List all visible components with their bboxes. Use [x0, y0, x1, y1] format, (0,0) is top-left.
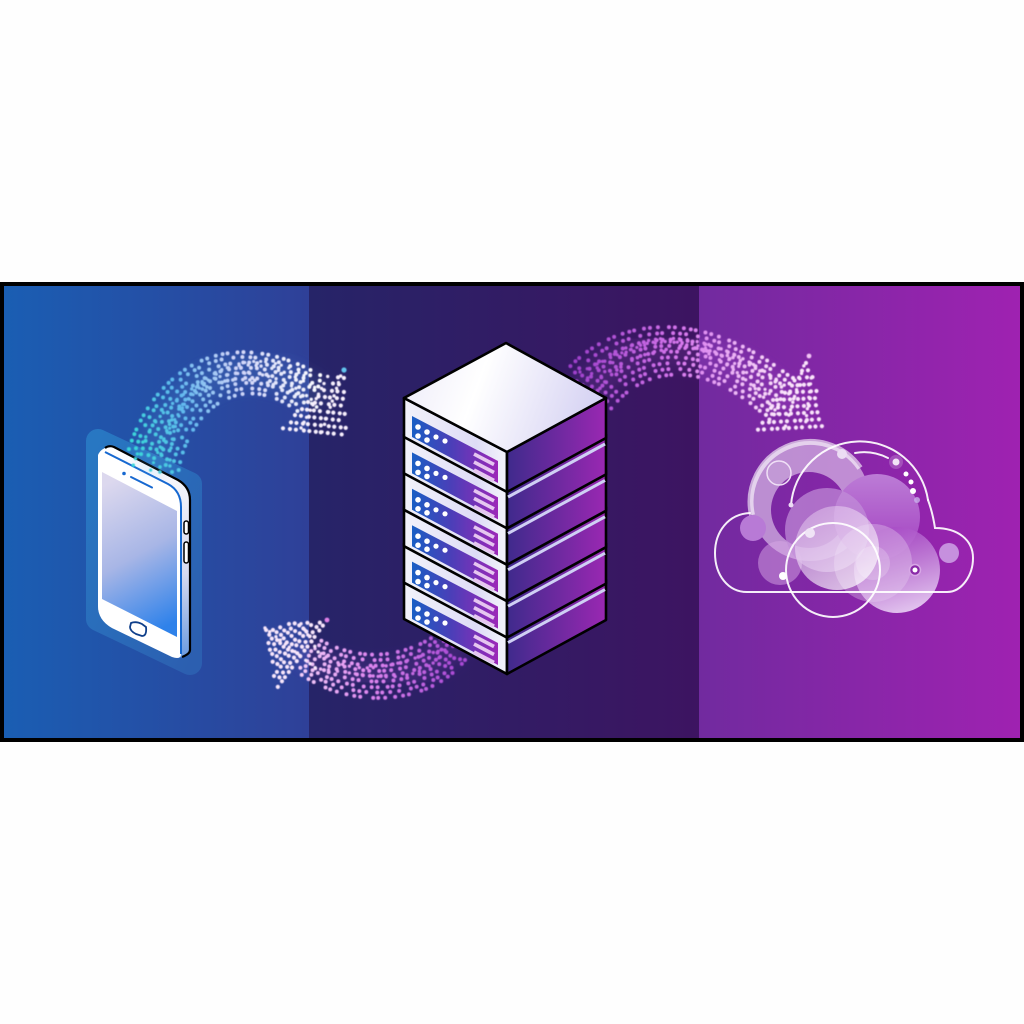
- panel: background banner: [0, 282, 1024, 742]
- icon: smartphone: [98, 441, 190, 663]
- icon: cloud: [715, 441, 973, 617]
- arrow: server particles to cloud: [565, 327, 825, 430]
- arrow: phone particles to server: [128, 352, 347, 475]
- icon: server stack: [404, 343, 606, 674]
- arrow: server particles back to phone: [264, 618, 465, 698]
